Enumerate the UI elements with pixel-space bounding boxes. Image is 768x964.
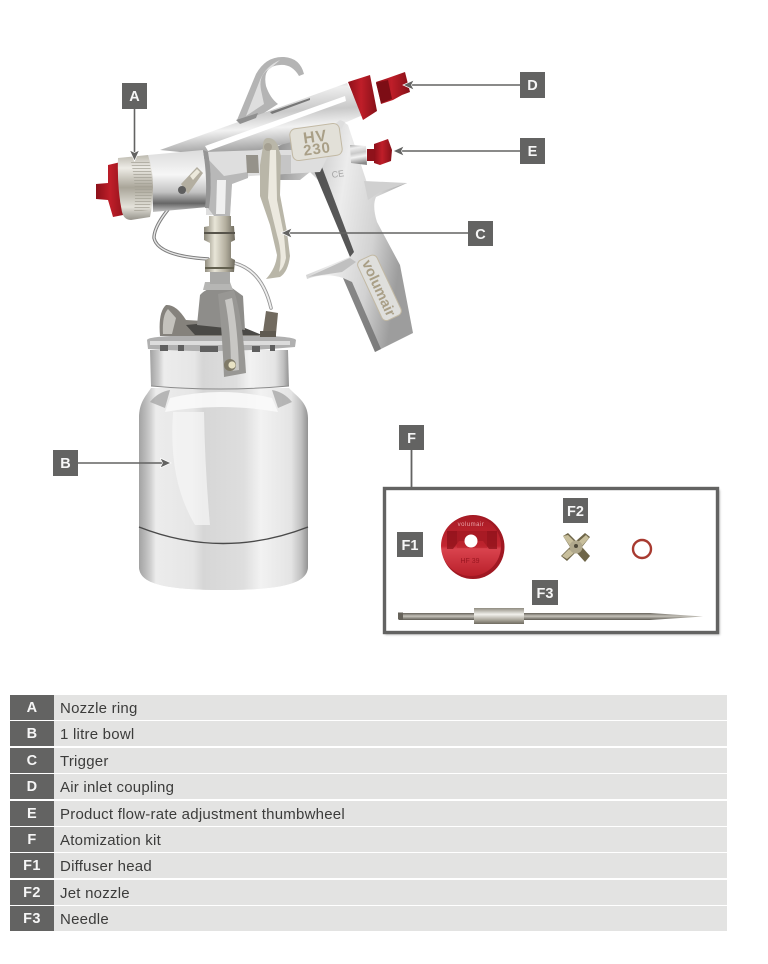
- trigger nut: [246, 155, 259, 173]
- model badge: HV: [302, 127, 329, 148]
- rear air coupling: [348, 72, 410, 120]
- callout A: A: [129, 89, 140, 105]
- CE mark: CE: [331, 168, 345, 180]
- callout F2: [563, 498, 588, 523]
- lid stem: [197, 287, 245, 330]
- callout F3: F3: [537, 586, 553, 602]
- row C: Trigger: [60, 753, 109, 770]
- bowl: [139, 282, 308, 590]
- row E: E: [27, 806, 37, 822]
- row A: [10, 695, 727, 720]
- F2: jet nozzle: [561, 533, 590, 562]
- callout F1: [397, 532, 423, 557]
- hanging hook: [237, 57, 304, 122]
- atomization kit frame: [384, 449, 720, 635]
- model badge: 230: [302, 139, 332, 160]
- row D: [10, 774, 727, 799]
- tube to bowl: [234, 263, 271, 308]
- callout A: [122, 83, 147, 160]
- row D: D: [27, 779, 37, 795]
- row C: [10, 748, 727, 773]
- air tubes: [154, 192, 271, 308]
- row F2: F2: [23, 885, 41, 901]
- row F1: F1: [23, 858, 41, 874]
- callout F3: [532, 580, 558, 605]
- model badge: [289, 123, 343, 161]
- row F1: [10, 853, 727, 878]
- bowl body: [139, 388, 308, 590]
- bowl lid: [147, 335, 296, 351]
- row B: 1 litre bowl: [60, 726, 134, 743]
- hose connector: [204, 216, 235, 272]
- handle: [270, 118, 413, 352]
- front body: [205, 120, 345, 215]
- F1: diffuser head: volumair: [458, 522, 484, 528]
- lid wing: [160, 305, 262, 336]
- row F2: [10, 880, 727, 905]
- callout F: F: [407, 431, 416, 447]
- row A: A: [27, 700, 37, 716]
- bowl collar: [150, 350, 289, 389]
- row F3: F3: [23, 911, 41, 927]
- callout C: C: [475, 227, 486, 243]
- F3: needle: [398, 608, 703, 624]
- row F: Atomization kit: [60, 832, 161, 849]
- row D: Air inlet coupling: [60, 779, 174, 796]
- tube fitting: [181, 167, 203, 194]
- callout F1: F1: [402, 538, 418, 554]
- legend table: [10, 695, 727, 931]
- tube to body: [154, 192, 208, 259]
- callout F: [399, 425, 424, 450]
- nozzle ring: [118, 155, 153, 220]
- trigger: [260, 138, 290, 279]
- front cylinder: [148, 150, 208, 212]
- row F3: Needle: [60, 911, 109, 928]
- row E: Product flow-rate adjustment thumbwheel: [60, 806, 345, 823]
- row F: [10, 827, 727, 852]
- callout E: E: [528, 144, 538, 160]
- barrel: [160, 83, 363, 160]
- flow thumbwheel: [350, 139, 392, 165]
- row F1: Diffuser head: [60, 858, 152, 875]
- handle brand: volumair: [358, 258, 398, 320]
- yoke strap: [218, 290, 246, 377]
- side fitting: [263, 311, 278, 334]
- callout B: [53, 450, 170, 476]
- callout D: [404, 72, 545, 98]
- row F: F: [27, 832, 37, 848]
- row B: [10, 721, 727, 746]
- callout B: B: [60, 456, 71, 472]
- row A: Nozzle ring: [60, 700, 138, 717]
- callout F2: F2: [567, 504, 584, 520]
- row F3: [10, 906, 727, 931]
- F1: diffuser head: HF 39: [460, 558, 480, 565]
- callout E: [394, 138, 545, 164]
- red nozzle cap: [96, 161, 128, 217]
- callout D: D: [527, 78, 538, 94]
- row E: [10, 801, 727, 826]
- F1: diffuser head: [441, 515, 504, 579]
- bowl screw: [224, 359, 236, 371]
- row C: C: [27, 753, 37, 769]
- callout C: [282, 221, 493, 246]
- O-ring seal: [633, 540, 651, 558]
- row F2: Jet nozzle: [60, 885, 130, 902]
- row B: B: [27, 726, 37, 742]
- spray gun: [96, 57, 413, 352]
